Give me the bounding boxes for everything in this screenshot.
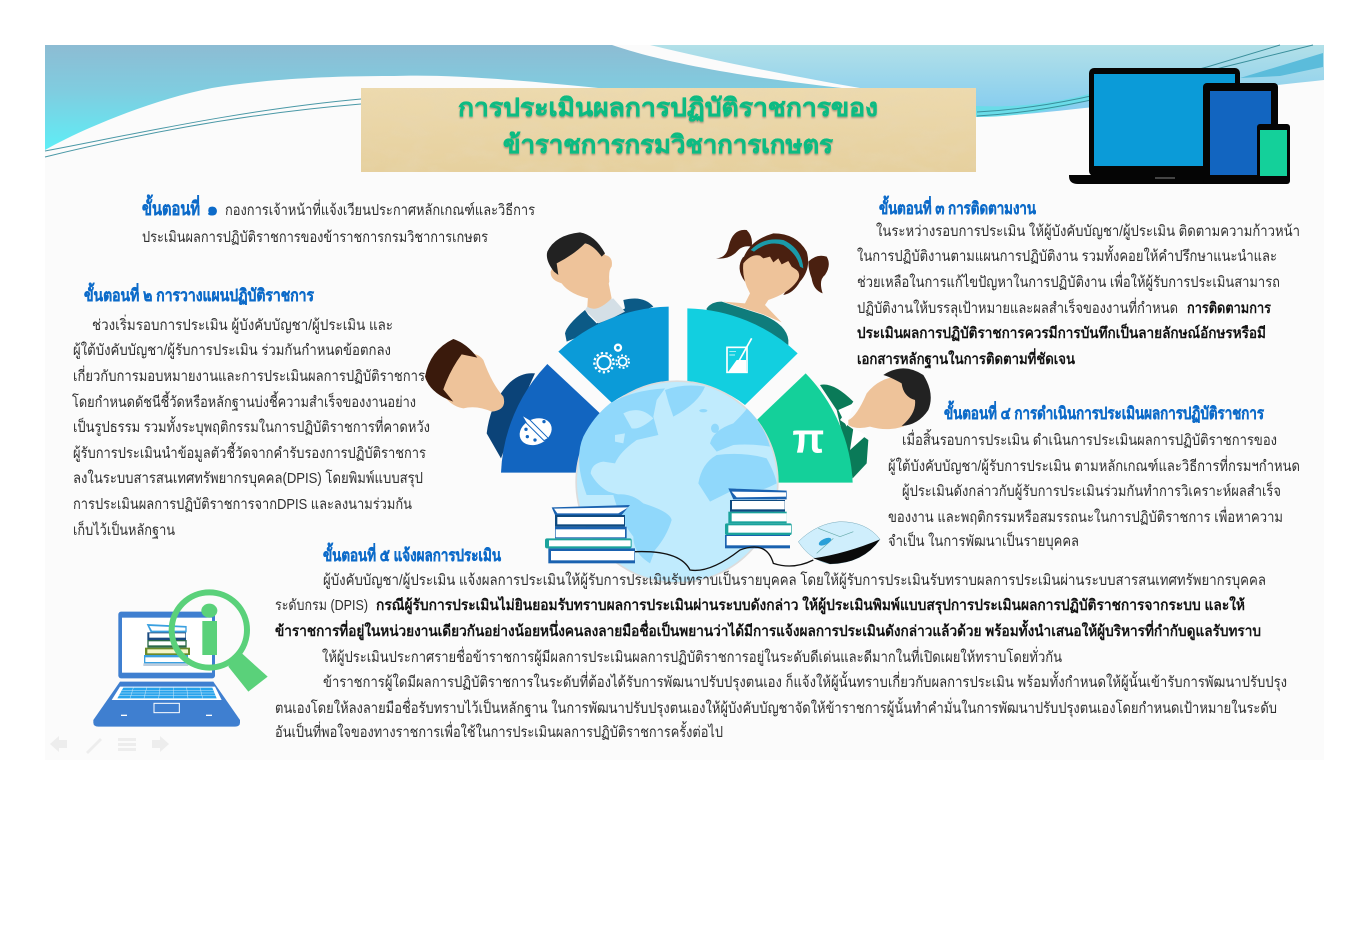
step 3 heading: ขั้นตอนที่ ๓ การติดตามงาน [879,195,1036,218]
laptop [93,612,240,727]
step 4 body: ผู้ประเมินดังกล่าวกับผู้รับการประเมินร่วมกันทำการวิเคราะห์ผลสำเร็จ [902,481,1281,500]
step 5 body: กรณีผู้รับการประเมินไม่ยินยอมรับทราบผลการประเมินผ่านระบบดังกล่าว ให้ผู้ประเมินพิมพ์แบบสรุปการประเมินผลการปฏิบัติราชการจากระบบ และให้ [376,595,1245,615]
laptop with magnifier icon [93,592,268,727]
sector: beaker [687,308,798,405]
sector: pi [753,373,853,483]
title text: ข้าราชการกรมวิชาการเกษตร [503,131,834,159]
icon: pi: π [792,415,824,462]
step 2 body: ผู้ใต้บังคับบัญชา/ผู้รับการประเมิน ร่วมกันกำหนดข้อตกลง [73,341,391,359]
title text [458,94,878,159]
books: right stack [725,488,792,548]
person head: right [848,368,931,429]
step 3 body: ปฏิบัติงานให้บรรลุเป้าหมายและผลสำเร็จของงานที่กำหนด [857,297,1178,318]
icon: gears [594,345,629,372]
step 1 text [142,194,535,246]
step 2 body: ลงในระบบสารสนเทศทรัพยากรบุคคล(DPIS) โดยพิมพ์แบบสรุป [73,469,423,488]
step 4 heading: ขั้นตอนที่ ๔ การดำเนินการประเมินผลการปฏิบัติราชการ [944,400,1265,423]
step 1 text: กองการเจ้าหน้าที่แจ้งเวียนประกาศหลักเกณฑ์และวิธีการ [225,199,535,219]
step 2 body: ผู้รับการประเมินนำข้อมูลตัวชี้วัดจากคำรับรองการปฏิบัติราชการ [73,442,426,462]
step 5 body: ระดับกรม (DPIS) [275,597,368,614]
person: girl [707,230,829,345]
step 5 body: อันเป็นที่พอใจของทางราชการเพื่อใช้ในการประเมินผลการปฏิบัติราชการครั้งต่อไป [275,721,723,741]
step 5 body: ข้าราชการที่อยู่ในหน่วยงานเดียวกันอย่างน้อยหนึ่งคนลงลายมือชื่อเป็นพยานว่าได้มีการแจ้งผลการประเมินดังกล่าวแล้วด้วย พร้อมทั้งนำเสนอให้ผู้บริหารที่กำกับดูแลรับทราบ [275,619,1261,641]
step 3 body: การติดตามการ [1187,299,1272,317]
step 4 body [888,429,1300,551]
central illustration [425,230,931,584]
step 3 body: ในการปฏิบัติงานตามแผนการปฏิบัติงาน รวมทั้งคอยให้คำปรึกษาแนะนำและ [857,245,1277,265]
mouse and cable [635,522,880,570]
step 2 heading: ขั้นตอนที่ ๒ การวางแผนปฏิบัติราชการ [84,282,315,305]
step 5 heading: ขั้นตอนที่ ๕ แจ้งผลการประเมิน [323,542,501,565]
globe [575,380,779,584]
magnifier [172,592,268,692]
step 4 body: จำเป็น ในการพัฒนาเป็นรายบุคคล [888,531,1079,551]
sector: palette [501,364,600,473]
step 1 text: ๑ [207,200,218,219]
icon: beaker and pencil [727,338,752,372]
icon: palette [515,413,556,450]
icon: devices [1069,68,1290,184]
step 1 text: ขั้นตอนที่ [142,194,200,220]
person: left [425,339,535,458]
step 2 body: ช่วงเริ่มรอบการประเมิน ผู้บังคับบัญชา/ผู้ประเมิน และ [92,314,393,334]
title banner [361,88,976,172]
step 2 body: เป็นรูปธรรม รวมทั้งระบุพฤติกรรมในการปฏิบัติราชการที่คาดหวัง [73,416,430,437]
step 3 body: เอกสารหลักฐานในการติดตามที่ชัดเจน [857,348,1076,369]
person: right [820,385,868,478]
step 2 body: โดยกำหนดดัชนีชี้วัดหรือหลักฐานบ่งชี้ความสำเร็จของงานอย่าง [72,391,416,411]
books: left stack [545,505,635,563]
step 2 body [72,314,430,539]
step 5 body: ให้ผู้ประเมินประกาศรายชื่อข้าราชการผู้มีผลการประเมินผลการปฏิบัติราชการอยู่ในระดับดีเด่นและดีมากในที่เปิดเผยให้ทราบโดยทั่วกัน [322,646,1062,666]
panel: slide background [45,45,1324,760]
step 3 body: ประเมินผลการปฏิบัติราชการควรมีการบันทึกเป็นลายลักษณ์อักษรหรือมี [857,323,1266,342]
step 3 body [857,222,1300,369]
step 2 body: เกี่ยวกับการมอบหมายงานและการประเมินผลการปฏิบัติราชการ [73,365,425,385]
header wave background [45,45,1324,157]
title text: การประเมินผลการปฏิบัติราชการของ [458,94,878,122]
step 4 body: เมื่อสิ้นรอบการประเมิน ดำเนินการประเมินผลการปฏิบัติราชการของ [902,429,1277,449]
step 1 text: ประเมินผลการปฏิบัติราชการของข้าราชการกรมวิชาการเกษตร [142,229,488,246]
step 2 body: การประเมินผลการปฏิบัติราชการจากDPIS และลงนามร่วมกัน [73,496,412,513]
small books [143,624,190,666]
step 4 body: ของงาน และพฤติกรรมหรือสมรรถนะในการปฏิบัติราชการ เพื่อหาความ [888,506,1283,526]
sector: gears [558,307,669,403]
step 2 body: เก็บไว้เป็นหลักฐาน [73,520,175,539]
person: top left [547,232,653,342]
navigation icons [50,736,169,754]
step 3 body: ช่วยเหลือในการแก้ไขปัญหาในการปฏิบัติงาน เพื่อให้ผู้รับการประเมินสามารถ [857,271,1280,291]
step 5 body [275,570,1287,741]
